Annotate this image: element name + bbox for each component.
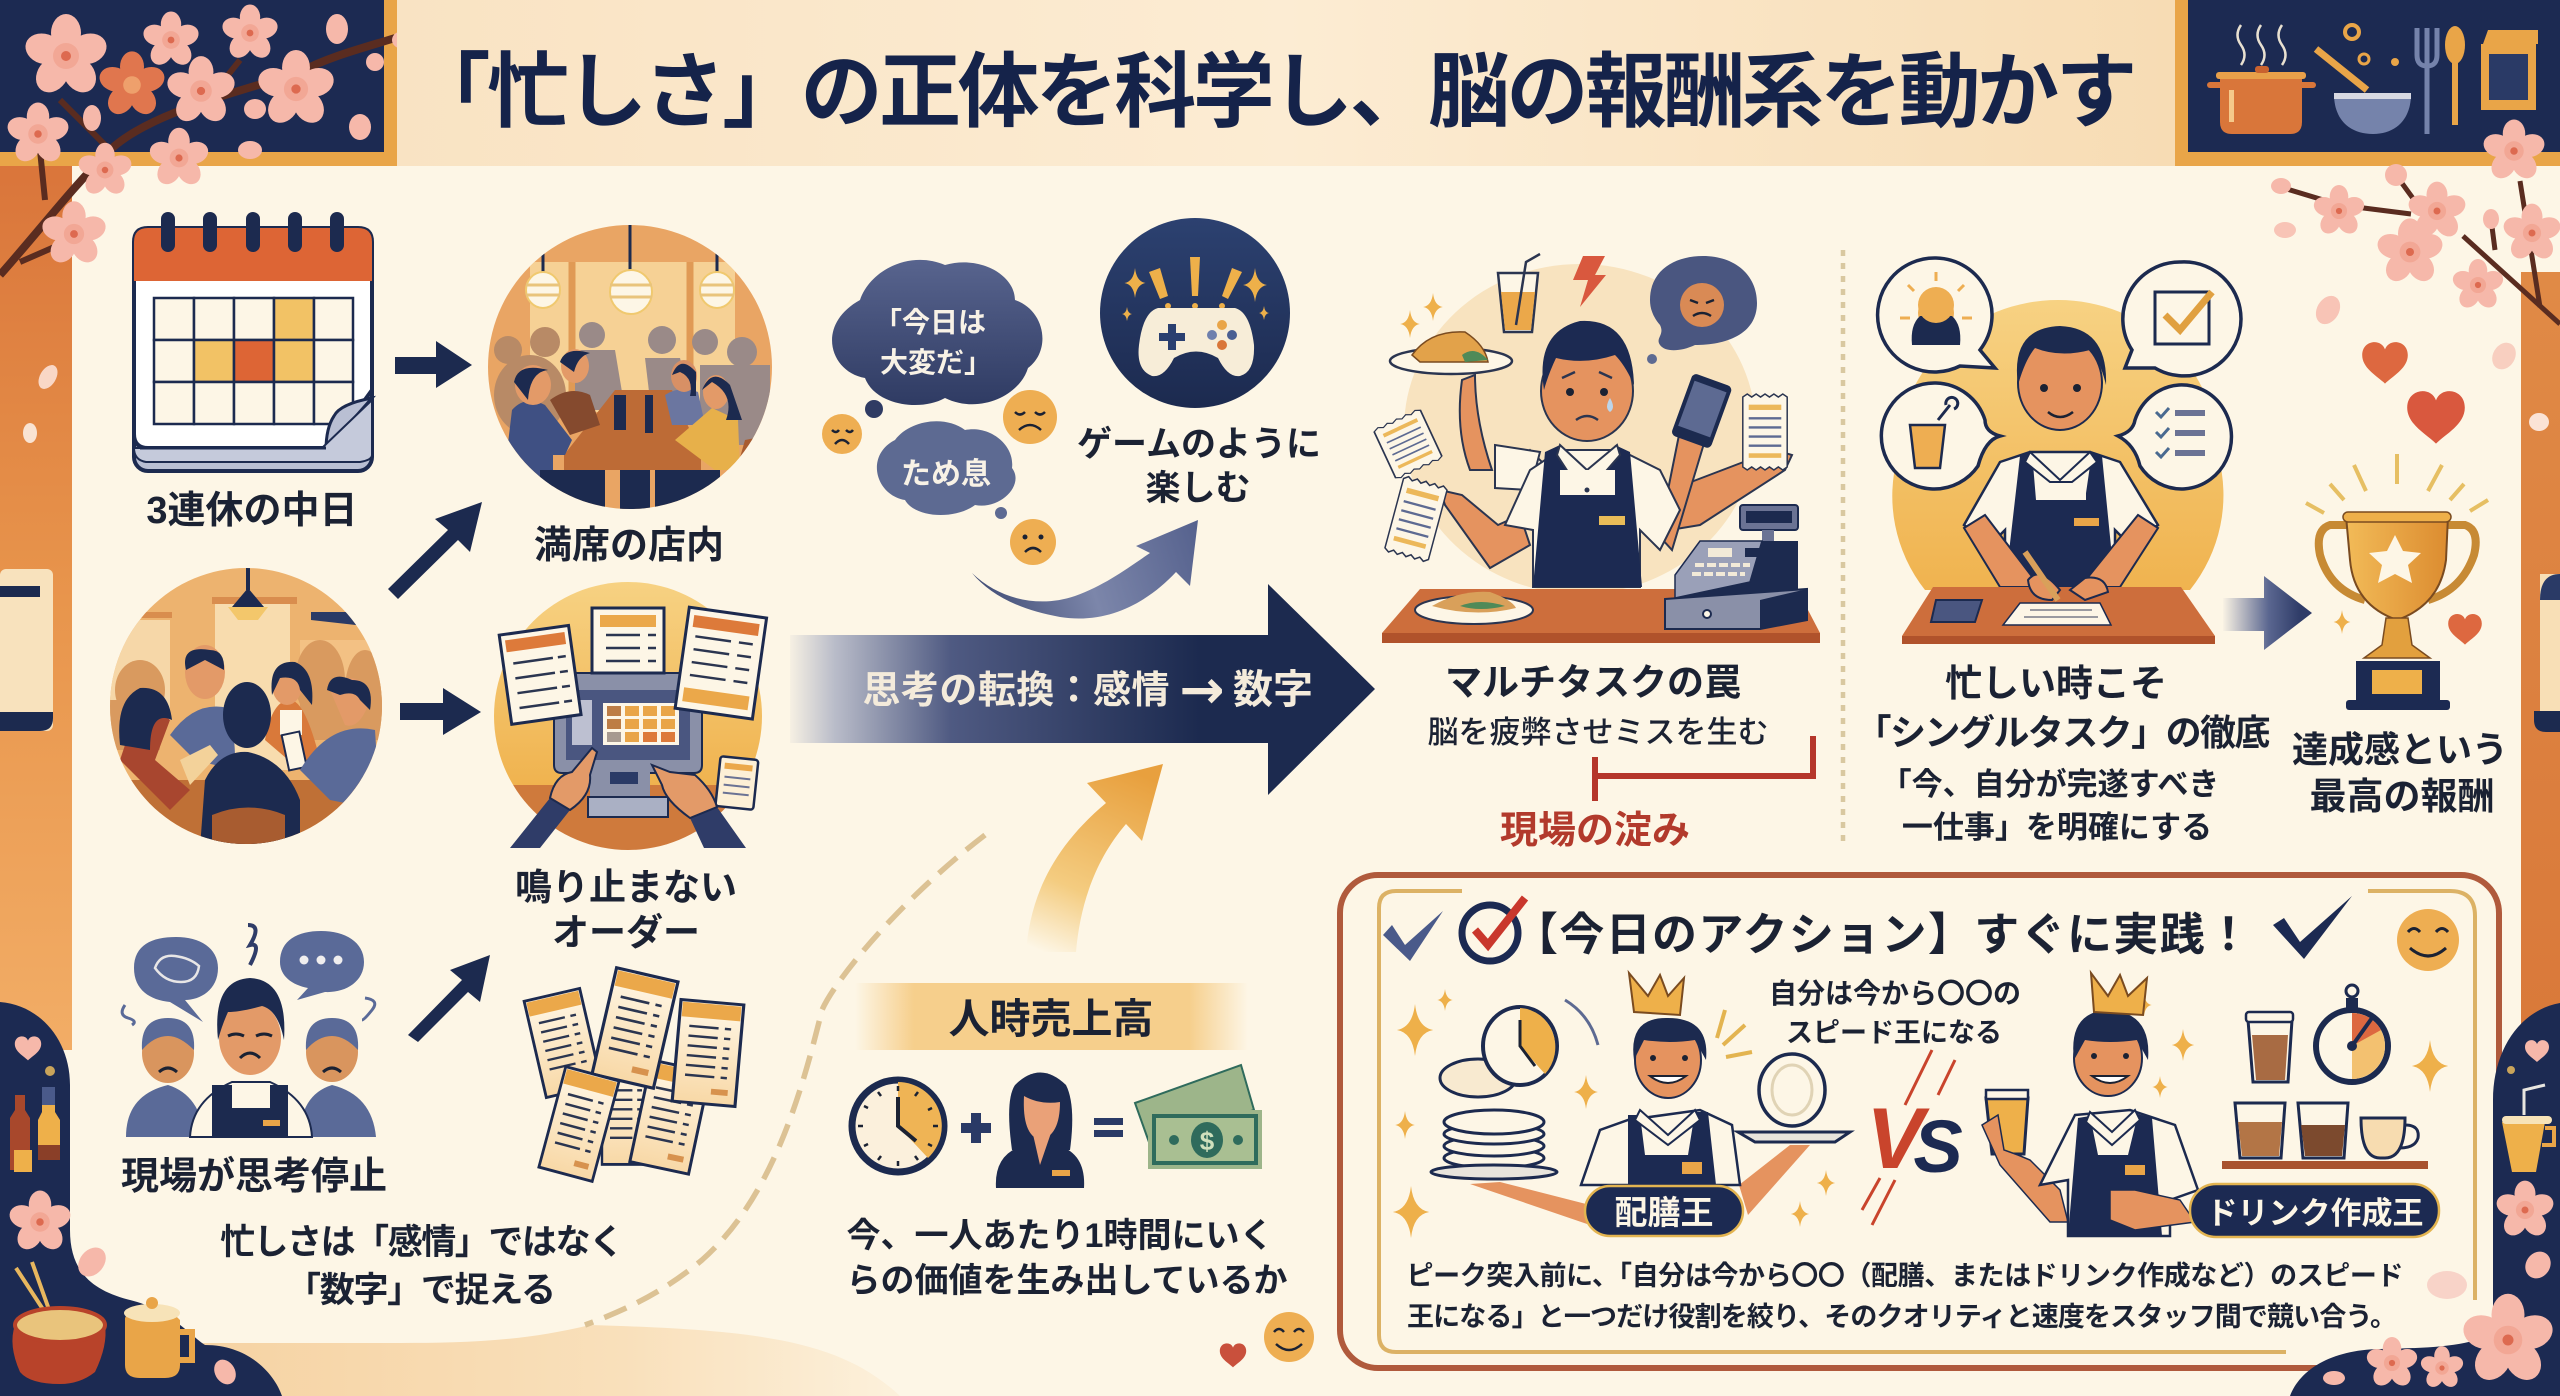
paragraph: 王になる」と一つだけ役割を絞り、そのクオリティと速度をスタッフ間で競い合う。 — [1407, 1302, 2397, 1332]
bubble: drink — [1881, 383, 2000, 489]
corner: bottom left food — [0, 1002, 282, 1396]
bracket — [1595, 736, 1813, 801]
icon: smile — [2397, 909, 2459, 971]
caption: speed king: スピード王になる — [1786, 1018, 2002, 1048]
label: 満席の店内: 満席の店内 — [534, 525, 724, 567]
illustration: order station — [494, 580, 767, 855]
top right blossoms — [2271, 120, 2560, 431]
text: 人時売上高の説明: らの価値を生み出しているか — [847, 1262, 1287, 1300]
illustration: guests — [110, 568, 390, 850]
illustration: full restaurant — [488, 225, 773, 520]
panel: left edge lantern — [0, 569, 53, 731]
cloud: 今日は大変だ: 「今日は — [874, 307, 986, 338]
label: 思考の転換: 思考の転換：感情 — [862, 670, 1170, 712]
arrow: team to orders — [408, 955, 490, 1042]
icon: game controller badge — [1100, 218, 1290, 408]
bubble: check — [2123, 262, 2241, 376]
badge: ドリンク作成王: ドリンク作成王 — [2206, 1196, 2424, 1231]
label: シングルタスクの徹底: 一仕事」を明確にする — [1902, 810, 2212, 845]
label: 達成感という最高の報酬: 達成感という — [2292, 729, 2508, 770]
label: 鳴り止まないオーダー: 鳴り止まない — [515, 867, 737, 908]
cloud: 今日は大変だ — [832, 260, 1042, 418]
band: 人時売上高: 人時売上高 — [948, 996, 1154, 1042]
cloud: 今日は大変だ: 大変だ」 — [880, 347, 992, 378]
emoji: sad faces — [822, 390, 1057, 565]
operator: plus — [961, 1113, 991, 1143]
caption: speed king: 自分は今から〇〇の — [1769, 978, 2021, 1009]
dashed path — [585, 835, 985, 1325]
illustration: single task worker — [1878, 258, 2241, 644]
icon: drink — [1498, 254, 1540, 332]
icon: smile and heart — [1220, 1312, 1314, 1367]
band: 人時売上高 — [855, 983, 1248, 1050]
label: 現場の淀み: 現場の淀み — [1500, 810, 1690, 852]
label: 忙しさは「感情」ではなく「数字」で捉える — [220, 1223, 624, 1310]
icon: clock — [852, 1080, 944, 1172]
label: 達成感という最高の報酬 — [2292, 729, 2508, 817]
label: マルチタスクの罠: 脳を疲弊させミスを生む — [1428, 715, 1768, 750]
label: 思考の転換: 数字 — [1233, 668, 1313, 712]
icon: banknotes: $ — [1200, 1126, 1215, 1156]
icon: staff — [996, 1072, 1084, 1188]
header: right kitchen icons panel — [2175, 0, 2560, 166]
label: 達成感という最高の報酬: 最高の報酬 — [2310, 776, 2494, 817]
plate with food — [1390, 332, 1512, 374]
panel: right edge lantern — [2534, 574, 2560, 732]
label: ゲームのように楽しむ: 楽しむ — [1145, 469, 1251, 508]
cups — [2222, 1012, 2428, 1169]
dotted divider — [1841, 250, 1845, 841]
icon: cash register — [1665, 505, 1807, 629]
cloud: ため息: ため息 — [901, 458, 991, 491]
title: 「忙しさ」の正体を科学し、脳の報酬系を動かす — [408, 47, 2138, 138]
label: ゲームのように楽しむ: ゲームのように — [1077, 425, 1321, 464]
label: マルチタスクの罠 — [1428, 662, 1768, 750]
icon: VS — [1862, 1050, 1963, 1225]
bubble: angry customer — [1647, 256, 1757, 364]
formula — [852, 1065, 1262, 1188]
label: シングルタスクの徹底 — [1856, 663, 2270, 845]
clock and plates — [1440, 1059, 1516, 1097]
icon: hearts — [2362, 342, 2465, 444]
label: シングルタスクの徹底: 忙しい時こそ — [1945, 663, 2167, 704]
icon: calendar — [134, 212, 372, 471]
label: 思考の転換 — [862, 658, 1313, 721]
face — [1541, 321, 1634, 441]
illustration: frozen team — [122, 925, 376, 1137]
arrow: curved blue — [972, 520, 1198, 619]
icon: VS: V — [1866, 1091, 1930, 1187]
icon: check marks — [1383, 896, 2352, 961]
header: left cherry blossom panel — [0, 0, 414, 443]
label: 3連休の中日: 3連休の中日 — [146, 490, 358, 532]
arrow: thinking shift — [790, 584, 1375, 795]
label: シングルタスクの徹底: 「今、自分が完遂すべき — [1881, 767, 2219, 802]
phone — [1671, 373, 1733, 449]
operator: equals — [1094, 1118, 1123, 1137]
illustration: serving king — [1393, 973, 1850, 1238]
label: シングルタスクの徹底: 「シングルタスク」の徹底 — [1856, 712, 2270, 753]
bubble: lamp — [1878, 258, 1995, 372]
icon: banknotes — [1135, 1065, 1262, 1169]
illustration: multitasking worker — [1373, 254, 1820, 643]
arrow: calendar to restaurant — [395, 341, 472, 388]
icon: VS: S — [1913, 1105, 1963, 1188]
badge: 配膳王 — [1585, 1186, 1743, 1236]
arrow: guests to orders — [400, 688, 481, 735]
text: 人時売上高の説明 — [847, 1217, 1287, 1300]
badge: 配膳王: 配膳王 — [1614, 1194, 1714, 1231]
counter — [1382, 589, 1820, 643]
heading: 【今日のアクション】すぐに実践！ — [1513, 909, 2251, 960]
label: 鳴り止まないオーダー: オーダー — [552, 912, 700, 953]
plates stack — [1444, 1110, 1544, 1168]
paragraph — [1406, 1261, 2404, 1332]
icon: stopwatch — [2316, 985, 2388, 1082]
icon: bolt — [1573, 256, 1606, 307]
text: 人時売上高の説明: 今、一人あたり1時間にいく — [847, 1217, 1273, 1255]
badge: ドリンク作成王 — [2190, 1184, 2439, 1237]
label: 現場が思考停止: 現場が思考停止 — [121, 1156, 387, 1198]
corner: bottom right blossoms — [2290, 1003, 2560, 1396]
cloud: ため息 — [877, 421, 1016, 519]
caption: speed king — [1769, 978, 2021, 1048]
icon: trophy — [2306, 454, 2488, 710]
label: 鳴り止まないオーダー — [515, 867, 737, 953]
paragraph: ピーク突入前に、「自分は今から〇〇（配膳、またはドリンク作成など）のスピード — [1406, 1261, 2404, 1291]
title banner — [397, 0, 2175, 166]
arrow: rising gold — [1026, 764, 1163, 952]
label: マルチタスクの罠: マルチタスクの罠 — [1445, 662, 1741, 703]
arrow: to reward — [2223, 576, 2312, 650]
label: 思考の転換: → — [1179, 658, 1225, 721]
label: ゲームのように楽しむ — [1077, 425, 1321, 508]
panel: today's action — [1340, 875, 2499, 1368]
illustration: pile of order slips — [524, 968, 744, 1181]
thought clouds — [822, 260, 1057, 565]
bubble: checklist — [2118, 385, 2231, 489]
arrow: to restaurant — [388, 502, 482, 599]
illustration: drink king — [1982, 973, 2448, 1237]
left cup — [1986, 1090, 2028, 1154]
label: 忙しさは「感情」ではなく「数字」で捉える: 「数字」で捉える — [286, 1271, 556, 1310]
label: 忙しさは「感情」ではなく「数字」で捉える: 忙しさは「感情」ではなく — [220, 1223, 624, 1262]
